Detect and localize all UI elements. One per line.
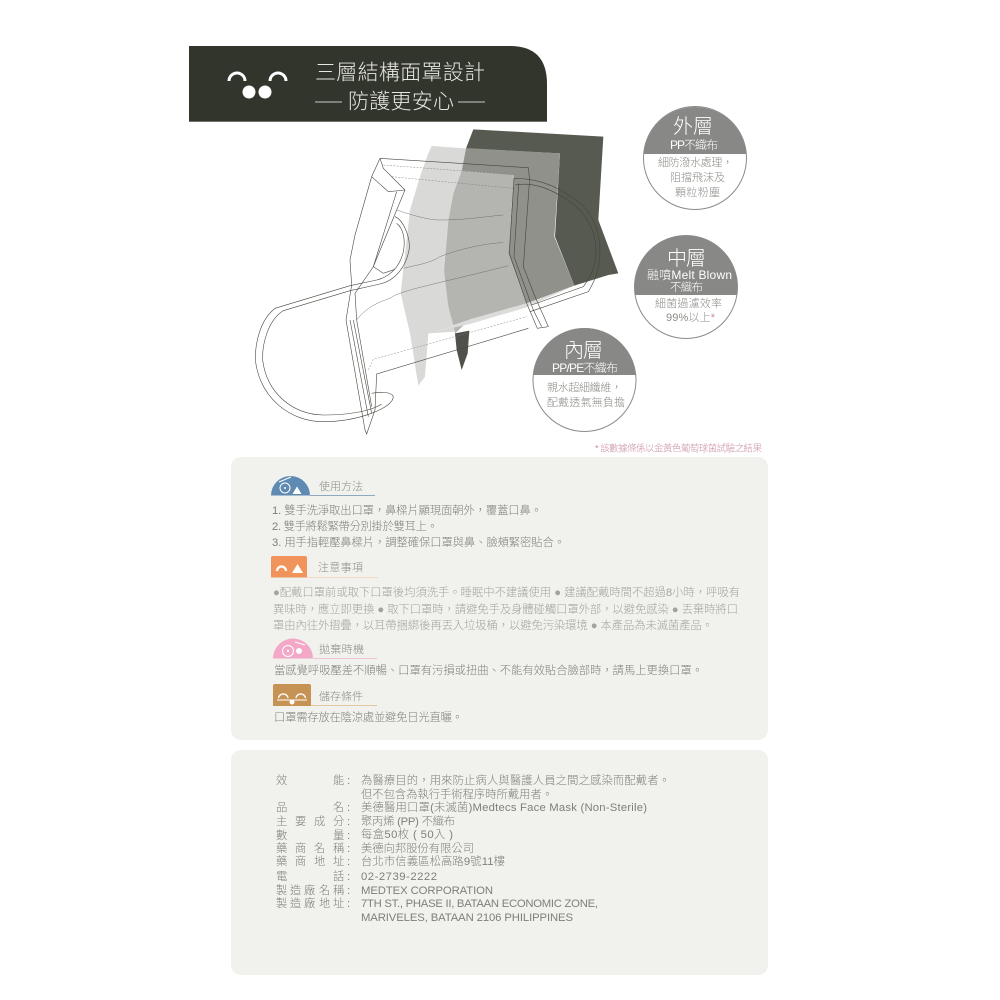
section: storage (273, 684, 463, 724)
callout: middle layer: 中層 (667, 247, 706, 270)
callout: inner layer (533, 328, 636, 432)
section: precautions: 注意事項 (318, 560, 363, 574)
icon: brown tab (273, 684, 311, 706)
labels column (276, 774, 350, 910)
callout: inner layer: 親水超細纖維， (547, 380, 622, 394)
callout: middle layer: 細菌過濾效率 (655, 296, 722, 310)
footnote: * 該數據條係以金黃色葡萄球菌試驗之結果 (595, 442, 762, 454)
middle layer (462, 148, 574, 303)
values column: 但不包含為執行手術程序時所戴用者。 (361, 787, 553, 801)
section: precautions: ●配戴口罩前或取下口罩後均須洗手。睡眠中不建議使用 ● 建議配戴時間不超過8小時，呼吸有 (273, 585, 740, 599)
callout: middle layer: 融噴Melt Blown (647, 268, 732, 282)
labels column: 藥商地址 (276, 855, 344, 868)
labels column: : (347, 816, 350, 828)
light strip (428, 286, 574, 333)
icon: pink eye dome (273, 638, 313, 658)
section: how to use: 3. 用手指輕壓鼻樑片，調整確保口罩與鼻、臉頰緊密貼合。 (272, 535, 565, 549)
labels column: : (347, 871, 350, 883)
labels column: : (347, 775, 350, 787)
section: disposal (273, 638, 703, 677)
values column: 聚丙烯 (PP) 不織布 (361, 815, 455, 828)
values column: 台北市信義區松高路9號11樓 (361, 855, 505, 868)
header banner (189, 46, 547, 122)
labels column: 效能 (276, 774, 344, 787)
section: how to use: 使用方法 (319, 479, 363, 493)
icon: blue eye dome (271, 476, 310, 496)
callout: inner layer: 配戴透氣無負擔 (547, 395, 625, 409)
callout: middle layer (634, 236, 738, 338)
callout: middle layer: 不織布 (670, 281, 703, 294)
title: 三層結構面罩設計 (315, 62, 485, 84)
light middle section (444, 171, 527, 333)
section: precautions: 罩由內往外摺疊，以耳帶捆綁後再丟入垃圾桶，以避免污染環境 ● 本產品為未滅菌產品。 (273, 618, 713, 632)
callout: outer layer: PP不織布 (670, 138, 718, 152)
labels column: : (347, 843, 350, 855)
dark tail (455, 331, 469, 370)
values column: 每盒50枚 ( 50入 ) (361, 828, 453, 841)
section: storage: 儲存條件 (319, 690, 363, 703)
callout: inner layer: PP/PE不織布 (552, 361, 618, 375)
section: disposal: 當感覺呼吸壓差不順暢、口罩有污損或扭曲、不能有效貼合臉部時，請馬上更換口罩。 (274, 663, 703, 677)
labels column: 數量 (276, 829, 344, 842)
labels column: : (347, 856, 350, 868)
labels column: 主要成分 (276, 815, 344, 828)
callout: outer layer: 外層 (673, 115, 713, 138)
icon: orange tab (271, 556, 307, 578)
values column: 為醫療目的，用來防止病人與醫護人員之間之感染而配戴者。 (361, 773, 670, 787)
mask outline (255, 158, 600, 434)
section: how to use: 1. 雙手洗淨取出口罩，鼻樑片顯現面朝外，覆蓋口鼻。 (272, 504, 542, 517)
labels column: : (347, 885, 350, 897)
section: precautions (271, 556, 740, 632)
callout: middle layer: 99%以上* (666, 311, 716, 324)
section: disposal: 拋棄時機 (319, 642, 364, 656)
values column: 02-2739-2222 (361, 871, 437, 883)
callout: outer layer: 阻擋飛沫及 (670, 171, 725, 184)
outer layer (466, 129, 618, 286)
callout: outer layer (644, 106, 746, 210)
labels column: 製造廠名稱 (276, 883, 344, 897)
values column (361, 773, 670, 924)
inner layer (401, 146, 466, 386)
subtitle: 防護更安心 (348, 90, 454, 114)
mask layers illustration (255, 129, 618, 434)
section: precautions: 異味時，應立即更換 ● 取下口罩時，請避免手及身體碰觸口罩外部，以避免感染 ● 丟棄時將口 (273, 602, 738, 616)
values column: 7TH ST., PHASE II, BATAAN ECONOMIC ZONE, (361, 898, 598, 910)
values column: 美德醫用口罩(未滅菌)Medtecs Face Mask (Non-Sterile) (361, 800, 647, 814)
callout: outer layer: 顆粒粉塵 (675, 186, 720, 199)
labels column: 品名 (276, 801, 344, 814)
section: storage: 口罩需存放在陰涼處並避免日光直曬。 (274, 710, 463, 724)
panel: usage instructions (231, 457, 768, 740)
callout: inner layer: 內層 (564, 340, 603, 362)
callout: outer layer: 細防潑水處理， (658, 155, 733, 169)
values column: MEDTEX CORPORATION (361, 885, 493, 897)
values column: MARIVELES, BATAAN 2106 PHILIPPINES (361, 912, 573, 924)
icon: face (229, 73, 286, 98)
section: how to use: 2. 雙手將鬆緊帶分別掛於雙耳上。 (272, 519, 438, 533)
values column: 美德向邦股份有限公司 (361, 841, 474, 855)
section: how to use (271, 476, 565, 549)
labels column: 電話 (276, 869, 344, 883)
labels column: 製造廠地址 (276, 896, 344, 910)
labels column: : (347, 898, 350, 910)
labels column: : (347, 802, 350, 814)
labels column: : (347, 830, 350, 842)
labels column: 藥商名稱 (276, 842, 344, 855)
panel: product specifications (231, 750, 768, 975)
